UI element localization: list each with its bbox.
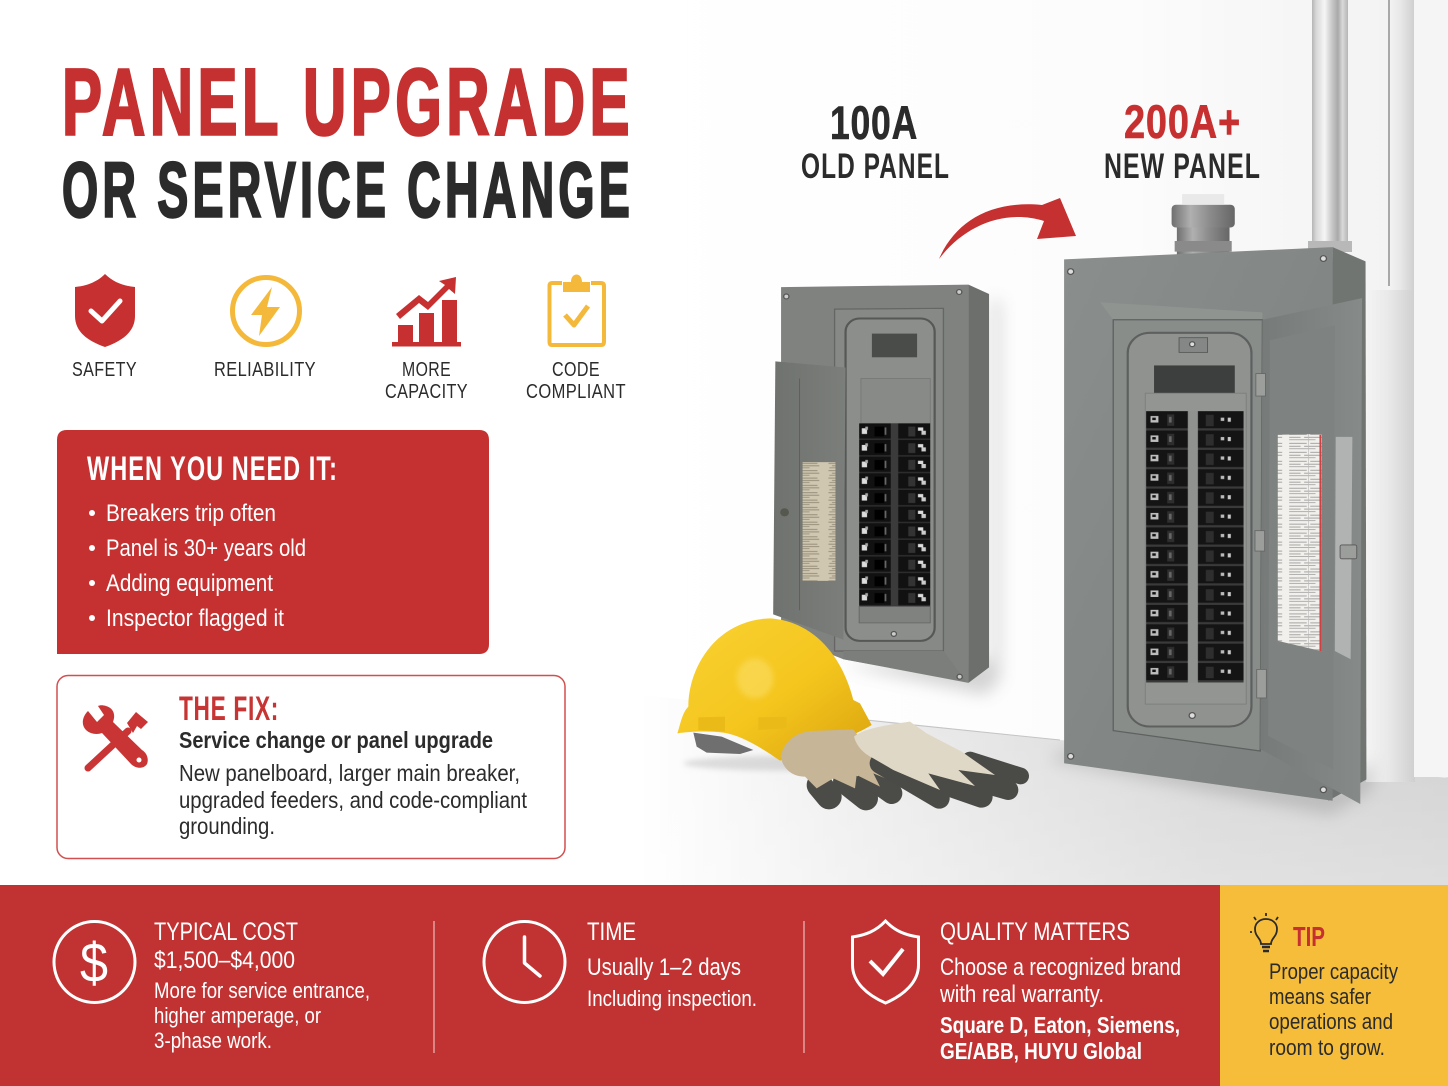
label: code compliant <box>526 358 626 403</box>
main breaker window <box>1154 365 1235 393</box>
label: reliability: RELIABILITY <box>214 358 316 381</box>
enclosure <box>1064 247 1366 801</box>
tan glove <box>781 729 893 798</box>
label: 100A old panel: OLD PANEL <box>801 147 950 186</box>
screws <box>1068 256 1326 793</box>
typical cost text: higher amperage, or <box>154 1003 321 1028</box>
label: 200A+ new panel: 200A+ <box>1124 95 1241 148</box>
hard hat <box>677 618 883 771</box>
enclosure <box>781 285 989 683</box>
time text: Usually 1–2 days <box>587 954 741 981</box>
soft shadows on wall <box>843 300 1372 815</box>
description: grounding. <box>179 813 275 839</box>
typical cost text: TYPICAL COST <box>154 918 298 946</box>
cream glove <box>854 722 1021 798</box>
label: more capacity <box>385 358 468 403</box>
label: more capacity: CAPACITY <box>385 380 468 403</box>
bullet list: Breakers trip often <box>106 500 276 527</box>
quality text: Choose a recognized brand <box>940 954 1181 981</box>
bottom band: red info strip <box>0 885 1220 1086</box>
bullet list: Inspector flagged it <box>106 605 284 632</box>
tip heading: TIP <box>1293 921 1325 952</box>
quality text: with real warranty. <box>939 981 1104 1008</box>
label: more capacity: MORE <box>402 358 451 381</box>
bullet list: Panel is 30+ years old <box>106 535 306 562</box>
screws <box>784 290 962 679</box>
icon: crossed tools <box>83 705 148 768</box>
panel: tip <box>1220 885 1448 1086</box>
icon: code clipboard <box>550 274 604 345</box>
door directory sheet <box>1278 434 1322 651</box>
heading: when you need it: WHEN YOU NEED IT: <box>87 450 338 488</box>
label: safety: SAFETY <box>72 358 137 381</box>
tip text: room to grow. <box>1269 1035 1385 1060</box>
quality text: GE/ABB, HUYU Global <box>940 1038 1142 1064</box>
benefit icons row <box>72 274 626 403</box>
label: 100A old panel <box>801 96 950 186</box>
heading: the fix: THE FIX: <box>179 690 279 728</box>
time text: TIME <box>587 918 636 946</box>
subheading: Service change or panel upgrade <box>179 727 493 753</box>
time text: Including inspection. <box>587 986 757 1011</box>
icon: capacity chart <box>392 277 461 346</box>
open door <box>1255 298 1362 804</box>
quality text: Square D, Eaton, Siemens, <box>940 1012 1180 1038</box>
service hub <box>1172 194 1235 255</box>
icon: clock <box>484 922 565 1002</box>
recess <box>846 319 935 641</box>
description <box>179 760 528 839</box>
panel: when you need it <box>57 430 489 654</box>
icon: dollar <box>54 922 135 1002</box>
tip text <box>1269 959 1398 1060</box>
quality text <box>939 918 1181 1064</box>
label: 200A+ new panel: NEW PANEL <box>1104 147 1261 186</box>
tip text: means safer <box>1269 984 1371 1009</box>
description: New panelboard, larger main breaker, <box>179 760 520 786</box>
title: OR SERVICE CHANGE <box>62 146 634 234</box>
typical cost text <box>154 918 370 1053</box>
panel: the fix <box>57 676 565 858</box>
arrow: old to new <box>939 198 1076 259</box>
icon: reliability bolt <box>232 278 300 344</box>
icon: quality shield <box>852 921 918 1003</box>
icon: safety shield <box>75 274 135 347</box>
tip text: operations and <box>1269 1009 1393 1034</box>
open door <box>773 361 846 640</box>
label: 100A old panel: 100A <box>830 96 918 149</box>
label: code compliant: COMPLIANT <box>526 380 626 403</box>
label: code compliant: CODE <box>552 358 600 381</box>
time text <box>587 918 757 1011</box>
breakers <box>1146 411 1244 682</box>
title <box>62 50 634 234</box>
tip text: Proper capacity <box>1269 959 1398 984</box>
main breaker window <box>872 334 917 357</box>
label: 200A+ new panel <box>1104 95 1261 186</box>
icon: light bulb <box>1250 913 1278 951</box>
new panel <box>1064 194 1366 804</box>
icon: dollar: $ <box>80 931 108 994</box>
description: upgraded feeders, and code-compliant <box>179 787 528 813</box>
recess <box>1128 333 1251 727</box>
breakers <box>859 423 930 607</box>
typical cost text: $1,500–$4,000 <box>154 947 295 974</box>
door directory sheet <box>803 462 835 581</box>
work gloves <box>781 722 1021 798</box>
typical cost text: More for service entrance, <box>154 978 370 1003</box>
typical cost text: 3-phase work. <box>154 1028 272 1053</box>
bullet list: Adding equipment <box>106 570 273 597</box>
panel headings: amperage labels <box>801 95 1261 186</box>
title: PANEL UPGRADE <box>62 50 634 156</box>
quality text: QUALITY MATTERS <box>940 918 1130 946</box>
photo scene: wall and floor <box>640 0 1448 885</box>
bullet list <box>89 500 306 632</box>
conduits and wall column <box>1308 0 1448 782</box>
old panel <box>773 285 989 683</box>
